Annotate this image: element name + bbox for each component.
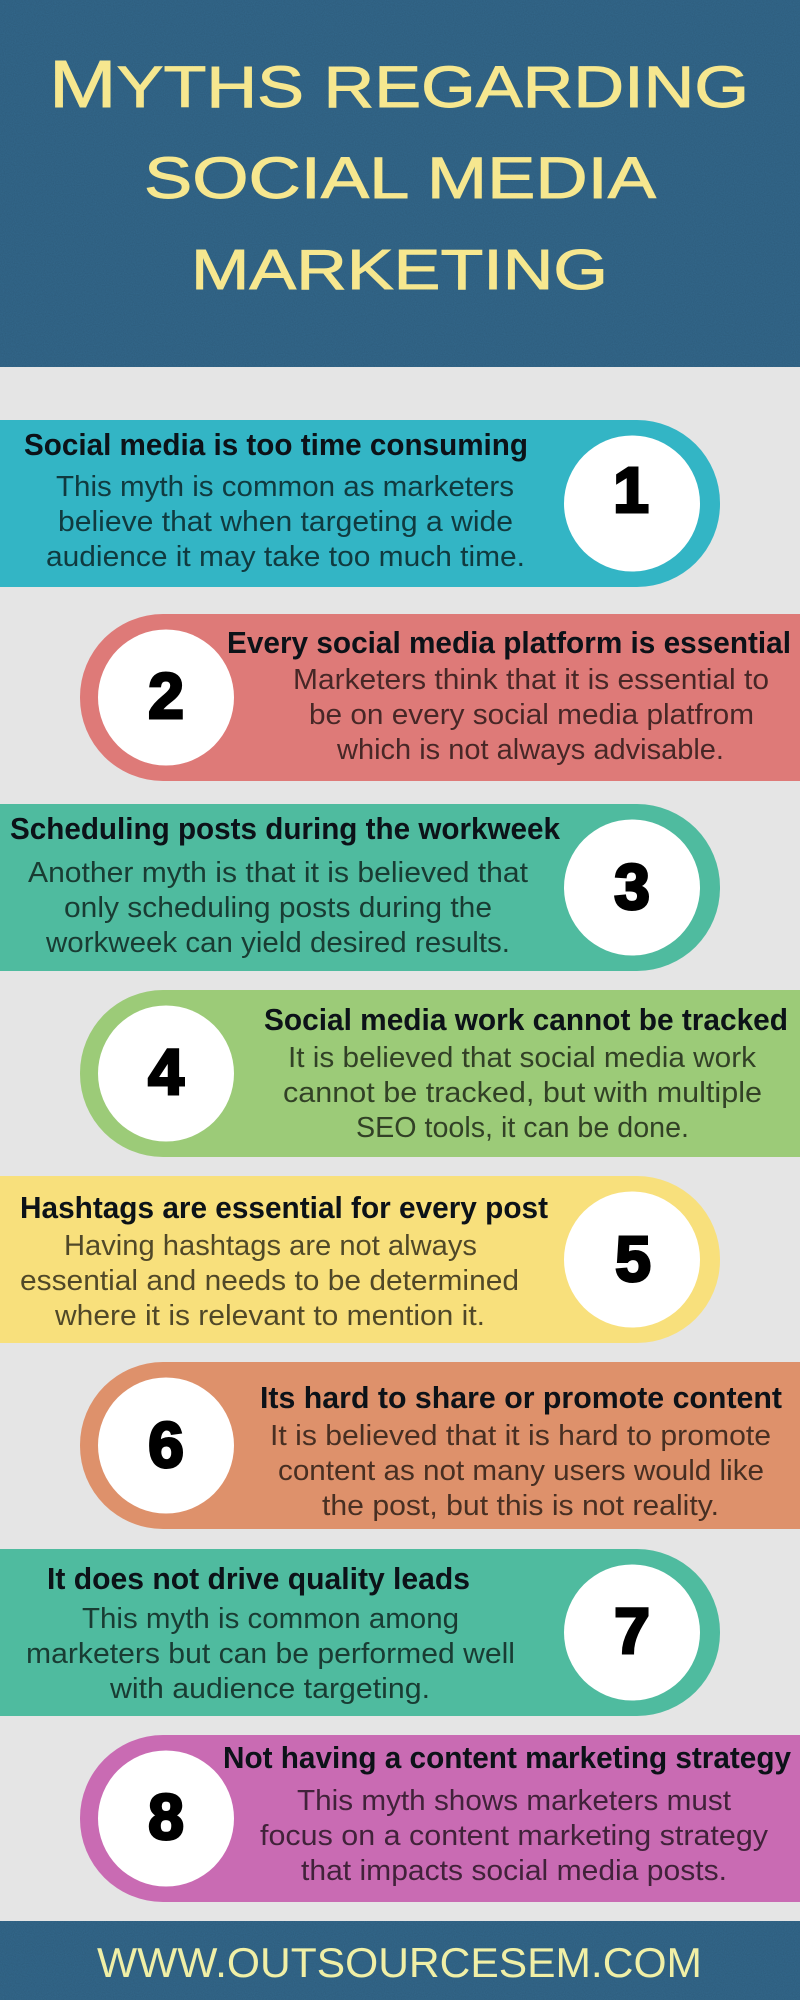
description 8: focus on a content marketing strategy	[260, 1820, 769, 1852]
description 7	[26, 1603, 515, 1705]
description 6	[270, 1420, 771, 1522]
description 5: essential and needs to be determined	[20, 1265, 519, 1297]
number badge 4	[98, 1006, 234, 1142]
description 3: workweek can yield desired results.	[45, 927, 510, 959]
description 4: cannot be tracked, but with multiple	[283, 1077, 762, 1109]
description 7: with audience targeting.	[109, 1673, 430, 1705]
panel: myth 5	[0, 1176, 720, 1343]
pill background 7	[0, 1549, 720, 1716]
footer banner	[0, 1921, 800, 2000]
description 8: This myth shows marketers must	[297, 1785, 731, 1817]
description 1	[46, 471, 525, 573]
panel: myth 4	[80, 990, 800, 1157]
number badge 2: 2	[148, 660, 184, 732]
footer URL: WWW.OUTSOURCESEM.COM	[97, 1939, 702, 1986]
title: MYTHS REGARDING	[49, 47, 749, 122]
description 2: be on every social media platfrom	[309, 699, 754, 731]
heading 2: Every social media platform is essential	[227, 625, 791, 660]
description 1: audience it may take too much time.	[46, 541, 525, 573]
description 4: SEO tools, it can be done.	[356, 1112, 689, 1144]
heading 8: Not having a content marketing strategy	[223, 1740, 792, 1775]
heading 3: Scheduling posts during the workweek	[10, 811, 561, 846]
description 2: Marketers think that it is essential to	[293, 664, 769, 696]
description 7: This myth is common among	[82, 1603, 459, 1635]
panel: myth 7	[0, 1549, 720, 1716]
description 8: that impacts social media posts.	[301, 1855, 727, 1887]
title: SOCIAL MEDIA	[144, 146, 656, 211]
heading 4: Social media work cannot be tracked	[264, 1002, 788, 1037]
number badge 1	[564, 436, 700, 572]
description 3	[28, 857, 528, 959]
panel: myth 3	[0, 804, 720, 971]
heading 7: It does not drive quality leads	[47, 1561, 470, 1596]
description 2: which is not always advisable.	[336, 734, 724, 766]
panel: myth 8	[80, 1735, 800, 1902]
number badge 6	[98, 1378, 234, 1514]
pill background 1	[0, 420, 720, 587]
number badge 2	[98, 630, 234, 766]
number badge 3	[564, 820, 700, 956]
title	[49, 47, 749, 302]
description 5	[20, 1230, 519, 1332]
title: MARKETING	[191, 238, 608, 302]
description 5: where it is relevant to mention it.	[54, 1300, 485, 1332]
header banner	[0, 0, 800, 367]
number badge 5	[564, 1192, 700, 1328]
number badge 3: 3	[614, 851, 650, 923]
description 4	[283, 1042, 762, 1144]
description 6: It is believed that it is hard to promote	[270, 1420, 771, 1452]
description 7: marketers but can be performed well	[26, 1638, 515, 1670]
number badge 8	[98, 1750, 234, 1886]
pill background 8	[80, 1735, 800, 1902]
description 3: Another myth is that it is believed that	[28, 857, 528, 889]
number badge 5: 5	[615, 1223, 651, 1295]
panel: myth 1	[0, 420, 720, 587]
pill background 4	[80, 990, 800, 1157]
description 5: Having hashtags are not always	[64, 1230, 477, 1262]
panel: myth 6	[80, 1362, 800, 1529]
heading 1: Social media is too time consuming	[24, 427, 528, 462]
number badge 1: 1	[613, 454, 649, 526]
panel: myth 2	[80, 614, 800, 781]
description 1: believe that when targeting a wide	[58, 506, 513, 538]
pill background 3	[0, 804, 720, 971]
description 4: It is believed that social media work	[288, 1042, 757, 1074]
description 6: content as not many users would like	[278, 1455, 764, 1487]
number badge 7	[564, 1564, 700, 1700]
description 3: only scheduling posts during the	[64, 892, 492, 924]
pill background 6	[80, 1362, 800, 1529]
description 6: the post, but this is not reality.	[322, 1490, 719, 1522]
description 1: This myth is common as marketers	[56, 471, 514, 503]
heading 5: Hashtags are essential for every post	[20, 1190, 548, 1225]
number badge 7: 7	[614, 1595, 650, 1667]
number badge 8: 8	[148, 1781, 184, 1853]
description 8	[260, 1785, 769, 1887]
pill background 5	[0, 1176, 720, 1343]
number badge 6: 6	[148, 1409, 184, 1481]
heading 6: Its hard to share or promote content	[260, 1380, 782, 1415]
description 2	[293, 664, 769, 766]
number badge 4: 4	[148, 1036, 184, 1108]
pill background 2	[80, 614, 800, 781]
